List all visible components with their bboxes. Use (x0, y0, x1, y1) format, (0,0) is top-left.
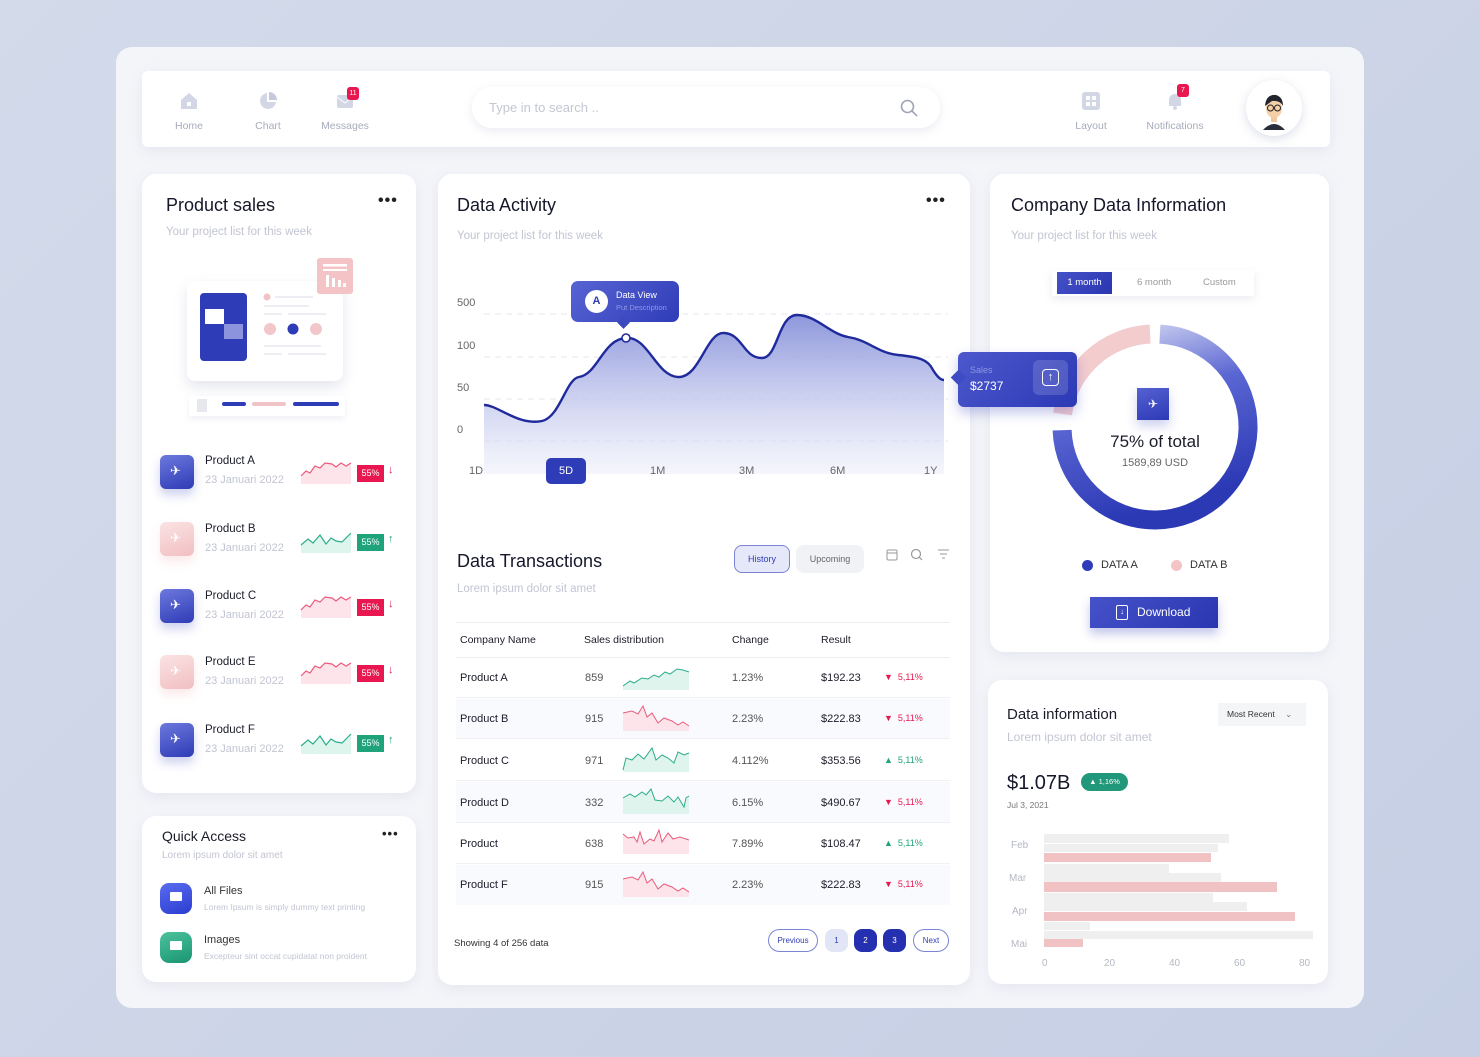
list: product A: 23 Januari 2022 (205, 474, 284, 486)
list: product B: ↑ (388, 533, 394, 545)
pagination: 3 (892, 936, 897, 945)
subtitle: Lorem ipsum dolor sit amet (1007, 730, 1152, 744)
list: product C (156, 589, 394, 634)
table: Sales distribution (584, 634, 664, 646)
pagination: 1 (834, 936, 839, 945)
bar chart: 20 (1104, 958, 1116, 969)
row D: 6.15% (732, 797, 763, 809)
line chart (457, 297, 948, 474)
row C: $353.56 (821, 755, 861, 767)
table (456, 622, 950, 897)
icons: calendar search filter (886, 548, 949, 560)
list: product F: 55% (361, 738, 380, 748)
tooltip: sales (958, 352, 1077, 407)
bar chart (1009, 834, 1313, 969)
list: product A: 55% (361, 468, 380, 478)
legend: DATA A (1101, 559, 1138, 571)
list: product E (158, 655, 394, 696)
list: product C: 23 Januari 2022 (205, 609, 284, 621)
panel: data activity (438, 174, 970, 985)
row C: 4.112% (732, 755, 768, 767)
nav: messages: Messages (321, 120, 369, 132)
row F: 915 (585, 879, 603, 891)
list: product F (156, 723, 394, 768)
list: product C: Product C (205, 590, 256, 602)
list: product E: 55% (361, 668, 380, 678)
row E (456, 824, 950, 864)
list: product E: ↓ (388, 664, 394, 676)
tooltip: data view (571, 281, 679, 322)
heading: Product sales (166, 195, 275, 215)
subtitle: Lorem ipsum dolor sit amet (162, 850, 283, 861)
x axis labels: 6M (830, 465, 845, 477)
legend: DATA B (1190, 559, 1228, 571)
row C: 971 (585, 755, 603, 767)
download button: ↓ (1120, 607, 1124, 616)
subtitle: Your project list for this week (166, 226, 312, 238)
nav: home: Home (175, 120, 203, 132)
heading: Data information (1007, 706, 1117, 723)
footer text: Showing 4 of 256 data (454, 938, 549, 949)
panel: quick access (142, 816, 416, 982)
row D: ▼ 5,11% (884, 797, 923, 807)
main container (116, 47, 1364, 1008)
donut center text: 1589,89 USD (1122, 457, 1188, 469)
tooltip: sales: $2737 (970, 379, 1003, 393)
line chart: 0 (457, 424, 463, 436)
row B: $222.83 (821, 713, 861, 725)
period tabs: Custom (1203, 277, 1236, 288)
list: product B: 23 Januari 2022 (205, 542, 284, 554)
subtitle: Your project list for this week (1011, 230, 1157, 242)
menu dots: ••• (926, 192, 946, 209)
nav: chart (255, 92, 281, 132)
row C (456, 740, 950, 781)
row F: ▼ 5,11% (884, 879, 923, 889)
nav: messages: 11 (349, 90, 357, 97)
panel: data information (988, 680, 1328, 984)
growth pill: ▲ 1,16% (1089, 777, 1120, 786)
item: all files (160, 883, 365, 914)
list: product F: ✈ (170, 731, 181, 746)
list: product F: 23 Januari 2022 (205, 743, 284, 755)
pagination: Next (923, 936, 939, 945)
list: product F: ↑ (388, 734, 394, 746)
row F: 2.23% (732, 879, 763, 891)
menu dots: ••• (378, 192, 398, 209)
line chart: 500 (457, 297, 475, 309)
list: product B: Product B (205, 523, 256, 535)
list: product F: Product F (205, 724, 255, 736)
item: all files: All Files (204, 885, 243, 897)
row B: 915 (585, 713, 603, 725)
row B: ▼ 5,11% (884, 713, 923, 723)
big value: $1.07B (1007, 772, 1070, 794)
nav: layout: Layout (1075, 120, 1107, 132)
nav: home (175, 93, 203, 132)
item: all files: Lorem Ipsum is simply dummy text printing (204, 902, 365, 912)
date: Jul 3, 2021 (1007, 800, 1049, 810)
x axis labels: 1Y (924, 465, 937, 477)
nav: notifications: Notifications (1146, 120, 1204, 132)
menu dots: ••• (382, 826, 399, 841)
list: product C: ↓ (388, 598, 394, 610)
subtitle: Lorem ipsum dolor sit amet (457, 583, 596, 595)
pagination: 2 (863, 936, 868, 945)
period tabs (1052, 270, 1254, 296)
donut center icon (1137, 388, 1169, 420)
list: product E: ✈ (170, 663, 181, 678)
table: Result (821, 634, 851, 646)
tabs: History (748, 554, 776, 564)
row A: Product A (460, 672, 508, 684)
tooltip: data view: A (593, 295, 600, 307)
item: images: Images (204, 934, 240, 946)
row E: Product (460, 838, 498, 850)
row F: Product F (460, 879, 508, 891)
donut center icon: ✈ (1148, 397, 1158, 411)
pagination (768, 929, 949, 952)
header bar: 7 (1181, 87, 1185, 94)
item: images (160, 932, 367, 963)
search box: Type in to search .. (489, 100, 599, 115)
panel: company data information (990, 174, 1329, 652)
period tabs: 6 month (1137, 277, 1171, 288)
donut center text (1110, 432, 1200, 469)
row B (456, 699, 950, 739)
row A: $192.23 (821, 672, 861, 684)
x axis labels: 3M (739, 465, 754, 477)
x axis labels: 5D (559, 465, 573, 477)
list: product A: ↓ (388, 464, 394, 476)
table: Change (732, 634, 769, 646)
list: product E: 23 Januari 2022 (205, 675, 284, 687)
bar chart: Mar (1009, 873, 1027, 884)
tooltip: data view: Data View (616, 290, 657, 300)
list: product C: ✈ (170, 597, 181, 612)
item: images: Excepteur sint occat cupidatat non proident (204, 951, 367, 961)
row A: ▼ 5,11% (884, 672, 923, 682)
bar chart: Feb (1011, 840, 1029, 851)
header bar (142, 71, 1330, 147)
row D: $490.67 (821, 797, 861, 809)
donut chart (1052, 324, 1258, 530)
list: product E: Product E (205, 656, 256, 668)
dropdown: Most Recent ⌄ (1227, 709, 1292, 719)
bar chart: 0 (1042, 958, 1048, 969)
panel: data activity: Upcoming (810, 554, 850, 564)
panel: product sales (142, 174, 416, 793)
row A: 1.23% (732, 672, 763, 684)
row F: $222.83 (821, 879, 861, 891)
donut center text: 75% of total (1110, 432, 1200, 451)
pagination: Previous (777, 936, 809, 945)
line chart: 50 (457, 382, 469, 394)
nav: layout (1075, 92, 1107, 132)
row C: ▲ 5,11% (884, 755, 923, 765)
list: product A (156, 455, 394, 500)
heading: data transactions: Data Transactions (457, 551, 602, 571)
legend (1082, 559, 1228, 571)
growth pill (1081, 773, 1128, 791)
x axis labels: 1D (469, 465, 483, 477)
bar chart: 40 (1169, 958, 1181, 969)
row D: 332 (585, 797, 603, 809)
row B: Product B (460, 713, 508, 725)
list: product B: 55% (361, 537, 380, 547)
row A: 859 (585, 672, 603, 684)
x axis labels: 1M (650, 465, 665, 477)
heading: Company Data Information (1011, 195, 1226, 215)
row A (456, 658, 950, 698)
tooltip: sales: ↑ (1048, 371, 1053, 383)
row E: ▲ 5,11% (884, 838, 923, 848)
download button (1090, 597, 1218, 628)
tabs (734, 545, 790, 573)
row C: Product C (460, 755, 509, 767)
list: product C: 55% (361, 602, 380, 612)
row F (456, 865, 950, 905)
row D (456, 782, 950, 823)
search box (472, 87, 940, 128)
bar chart: 60 (1234, 958, 1246, 969)
list: product B (158, 522, 394, 564)
row E: 638 (585, 838, 603, 850)
download button: Download (1137, 605, 1190, 619)
row E: 7.89% (732, 838, 763, 850)
avatar (1246, 80, 1302, 136)
list: product A: Product A (205, 455, 255, 467)
heading: Data Activity (457, 195, 556, 215)
row B: 2.23% (732, 713, 763, 725)
table: Company Name (460, 634, 536, 646)
row E: $108.47 (821, 838, 861, 850)
list: product B: ✈ (170, 530, 181, 545)
bar chart: 80 (1299, 958, 1311, 969)
illustration (184, 258, 353, 419)
dropdown (1218, 703, 1306, 726)
tooltip: sales: Sales (970, 365, 993, 375)
tooltip: data view: Put Description (616, 303, 667, 312)
subtitle: Your project list for this week (457, 230, 603, 242)
bar chart: Apr (1012, 906, 1028, 917)
x axis labels (469, 458, 938, 484)
heading: Quick Access (162, 828, 246, 844)
row D: Product D (460, 797, 509, 809)
nav: notifications (1146, 84, 1204, 132)
bar chart: Mai (1011, 939, 1027, 950)
nav: chart: Chart (255, 120, 281, 132)
line chart: 100 (457, 340, 475, 352)
period tabs: 1 month (1067, 277, 1102, 288)
list: product A: ✈ (170, 463, 181, 478)
nav: messages (321, 87, 369, 132)
